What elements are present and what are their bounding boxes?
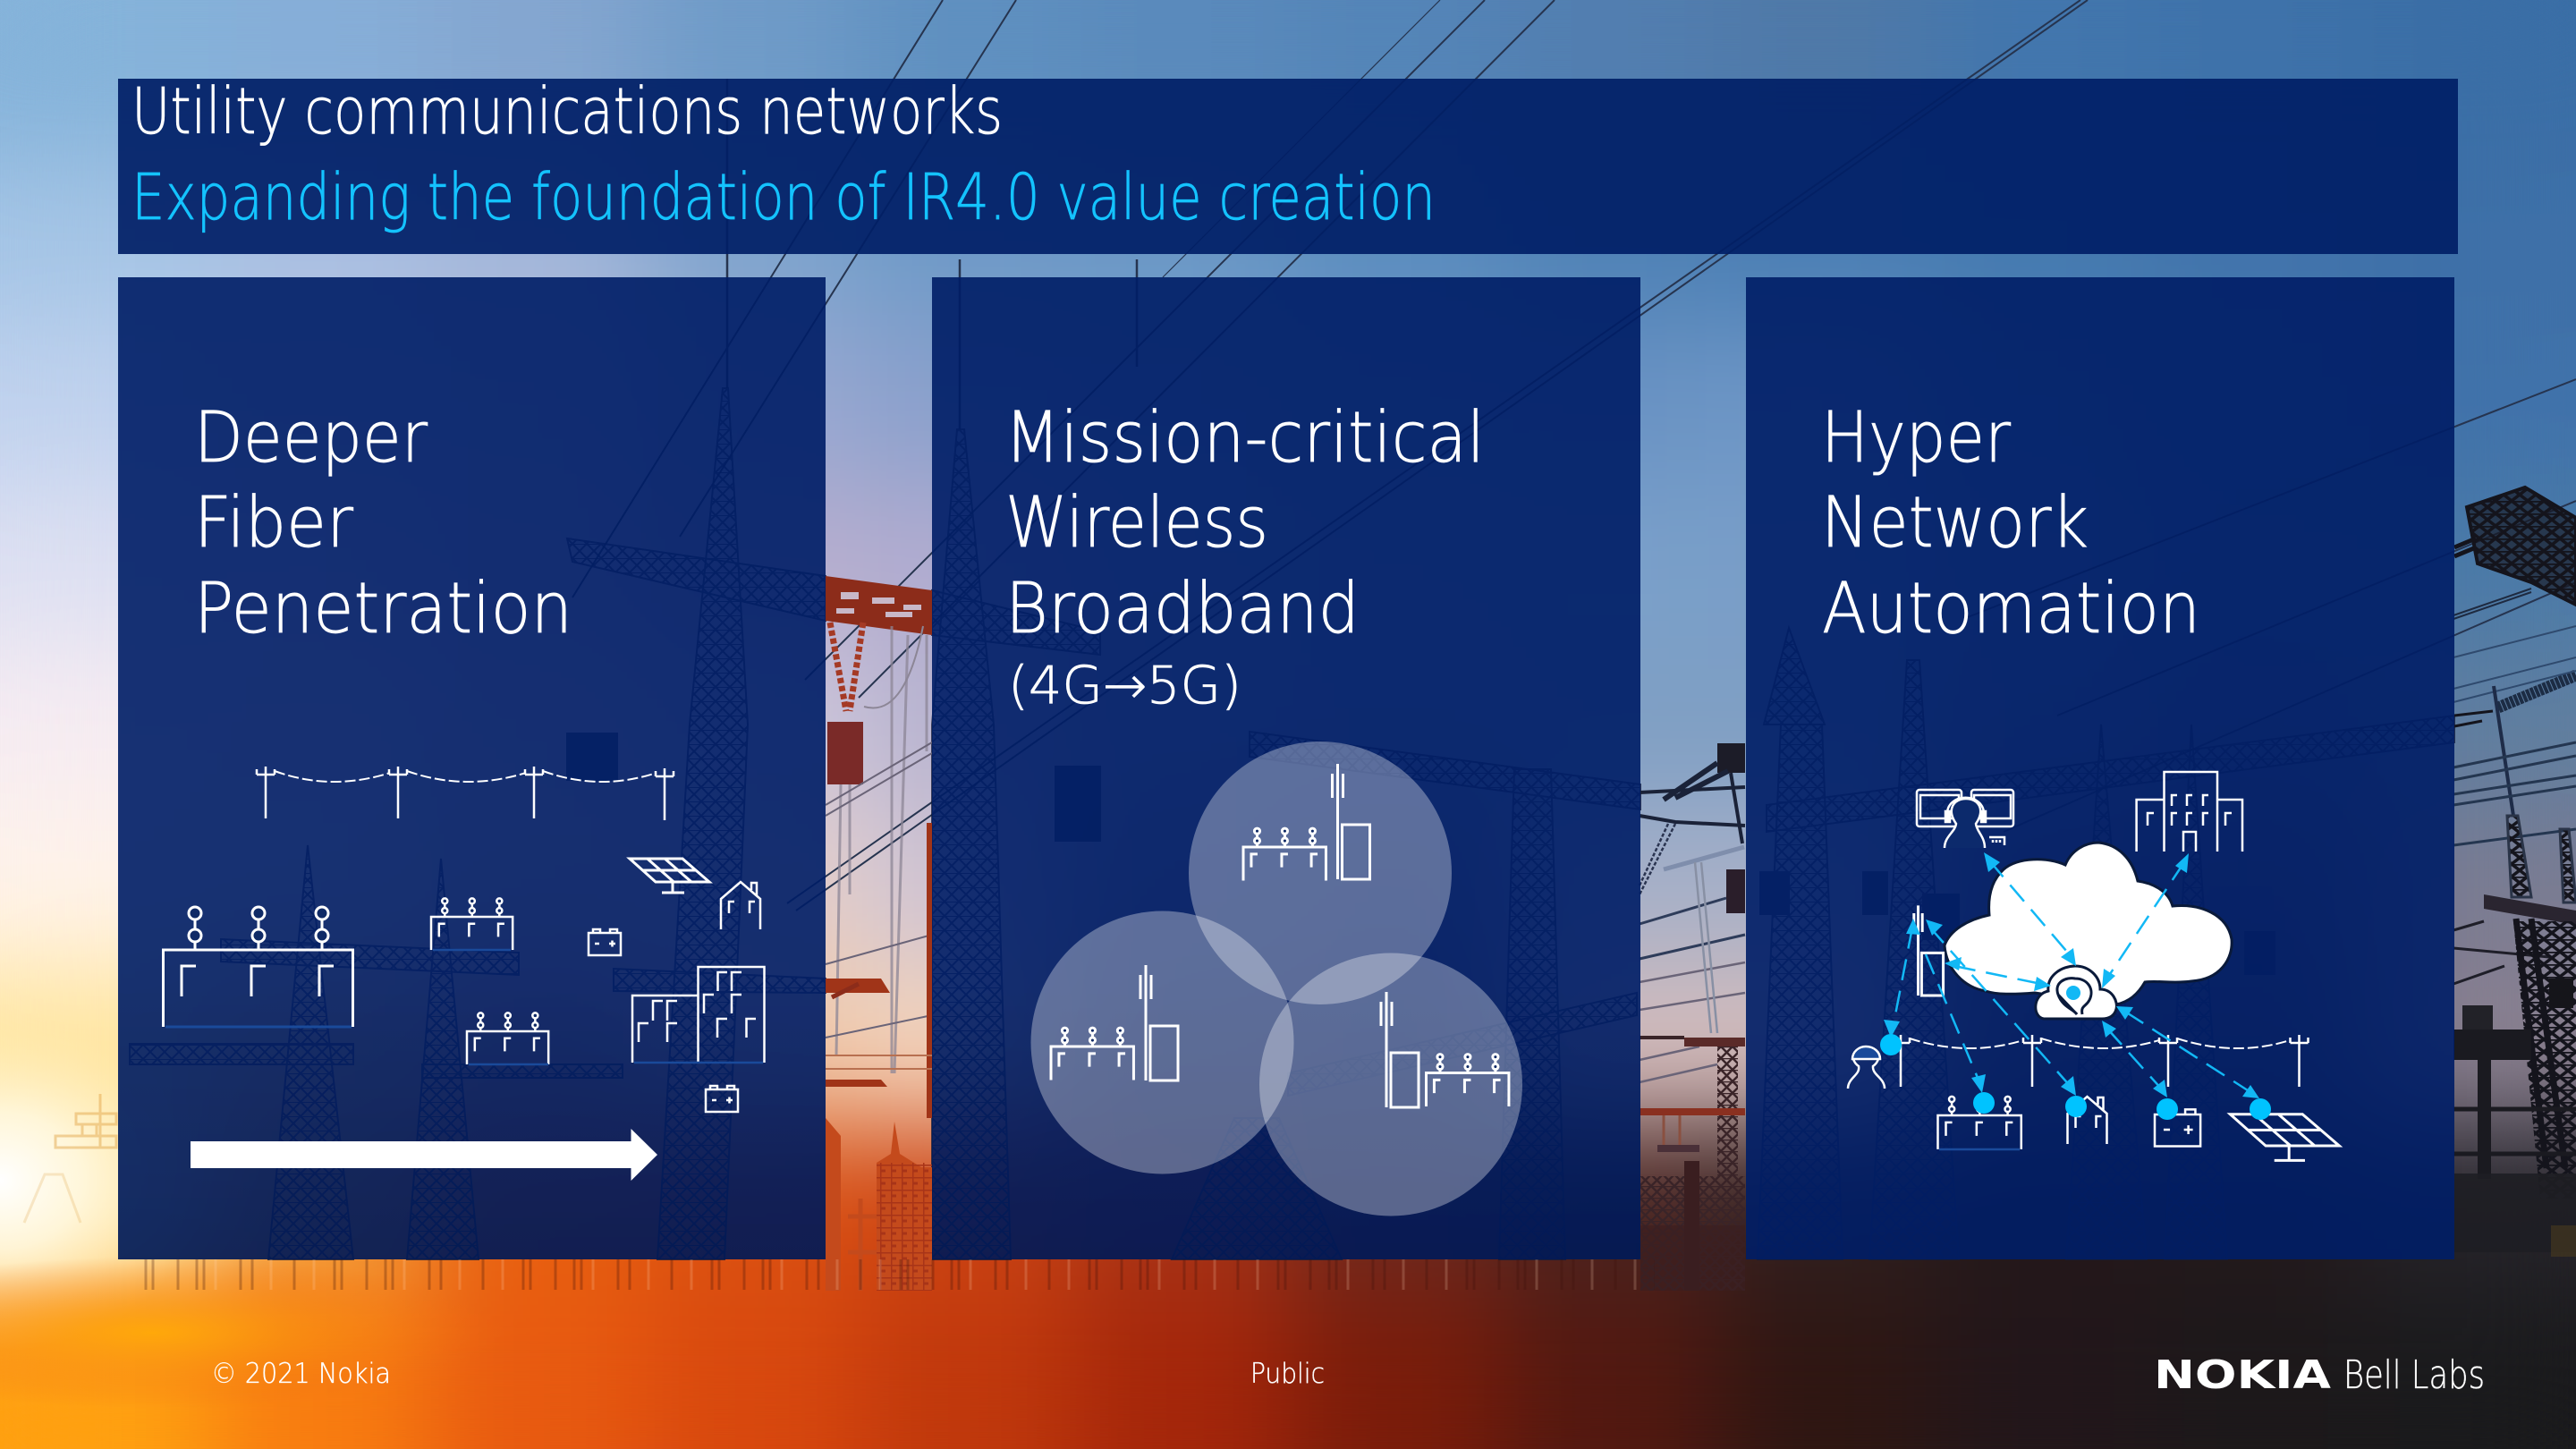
icon: cell site left	[1051, 965, 1178, 1080]
coverage circles	[1030, 741, 1522, 1216]
logo: Nokia Bell Labs	[2154, 1352, 2485, 1398]
title: white line: Utility communications networks	[131, 74, 1003, 148]
icon: small AI cloud	[2036, 966, 2116, 1019]
fence line along the bottom	[134, 1259, 1655, 1290]
heading: Deeper Fiber Penetration	[194, 398, 572, 649]
overhead wires	[572, 0, 2576, 911]
icon: small substation 1	[431, 898, 513, 950]
heading: Hyper Network Automation: Hyper	[1821, 398, 2011, 479]
panel: Mission-critical Wireless Broadband	[932, 277, 1640, 1259]
heading: Deeper Fiber Penetration: Fiber	[194, 483, 353, 564]
icon: office buildings	[632, 967, 764, 1063]
right-centre gap: truss, wires and dark structures	[1640, 743, 1745, 1291]
icon: office building	[2137, 772, 2242, 852]
icon: small substation 2	[467, 1013, 548, 1064]
heading: Hyper Network Automation: Automation	[1822, 569, 2200, 649]
icon: cell site top	[1243, 764, 1370, 880]
logo: Nokia Bell Labs: Bell Labs	[2343, 1352, 2485, 1398]
cyan endpoint dots	[1880, 1034, 2271, 1120]
icon: large cloud	[1945, 843, 2232, 1004]
icon: solar panel	[2230, 1114, 2339, 1160]
icon: operator at monitors	[1917, 790, 2013, 848]
heading: Mission-critical Wireless Broadband: Mission-critical	[1004, 398, 1485, 479]
heading: Hyper Network Automation: Network	[1821, 483, 2089, 564]
icon: brain with gear	[2057, 979, 2091, 1014]
subtitle: cyan line: Expanding the foundation of IR4.0 value creation	[131, 160, 1436, 234]
icon: field worker	[1848, 1046, 1885, 1089]
icon: cell site right	[1381, 992, 1509, 1107]
dashed data links	[1893, 860, 2250, 1092]
pylons and trusses seen behind the panels	[130, 388, 2454, 1259]
icon: house	[2068, 1097, 2107, 1144]
icon: utility poles with dashed fiber	[1892, 1035, 2308, 1087]
arrow: fiber moves deeper	[191, 1129, 657, 1181]
icon: substation	[1937, 1097, 2021, 1149]
icon: battery 1	[589, 929, 621, 955]
title bar	[118, 74, 2458, 254]
heading: Deeper Fiber Penetration: Penetration	[194, 569, 572, 649]
arrowheads	[1884, 852, 2259, 1098]
heading: Mission-critical Wireless Broadband: Broadband	[1005, 569, 1360, 649]
icon: large substation	[163, 907, 352, 1027]
icon: battery	[2155, 1109, 2200, 1147]
icon: house	[721, 882, 760, 929]
icon: battery 2	[706, 1086, 738, 1112]
pale left-side distant pylons	[24, 1094, 116, 1223]
subheading: 4G to 5G: (4G→5G)	[1008, 655, 1241, 716]
logo: Nokia Bell Labs: NOKIA	[2154, 1352, 2331, 1398]
icon: utility poles with dashed fiber	[257, 767, 674, 820]
panel: Hyper Network Automation	[1746, 277, 2454, 1259]
left gap: red sunlit truss, transformer and lower structures	[826, 576, 932, 1291]
footer: copyright: © 2021 Nokia	[211, 1358, 391, 1390]
heading: Mission-critical Wireless Broadband	[1004, 398, 1485, 716]
footer: classification: Public	[1250, 1358, 1325, 1390]
heading: Mission-critical Wireless Broadband: Wireless	[1005, 483, 1268, 564]
heading: Deeper Fiber Penetration: Deeper	[194, 398, 428, 479]
icon: cell tower	[1914, 905, 1944, 996]
right edge: black truss, wires and substation structures	[2453, 487, 2576, 1257]
panel: Deeper Fiber Penetration	[118, 277, 826, 1259]
heading: Hyper Network Automation	[1821, 398, 2200, 649]
icon: solar panel	[630, 859, 709, 893]
